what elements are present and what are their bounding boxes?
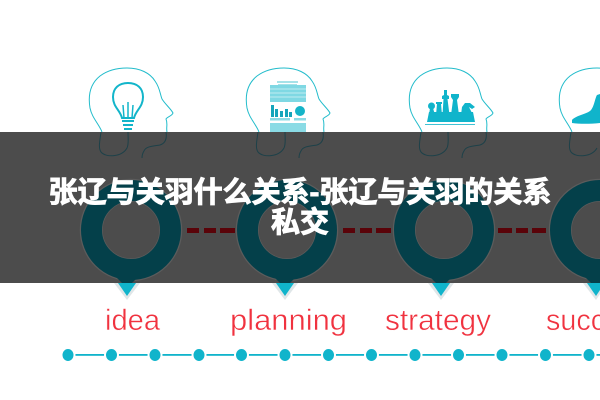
ring 2 bbox=[247, 190, 327, 288]
icon: hand shape bbox=[572, 94, 600, 124]
dark overlay band bbox=[0, 132, 600, 283]
pins below rings bbox=[114, 283, 600, 300]
ring 1 bbox=[91, 190, 171, 288]
icon: light bulb bbox=[113, 83, 143, 129]
dashes 1 bbox=[187, 228, 235, 233]
label: planning: planning bbox=[230, 304, 347, 337]
label: idea: idea bbox=[105, 304, 160, 337]
title bbox=[49, 176, 551, 239]
icon: chess pieces bbox=[425, 90, 475, 125]
timeline with dots bbox=[62, 348, 600, 362]
head outline: idea bbox=[89, 68, 173, 132]
ring 3 bbox=[404, 190, 484, 288]
head outline: strategy bbox=[409, 68, 493, 132]
neck lines bbox=[99, 132, 597, 158]
label: strategy: strategy bbox=[385, 304, 491, 337]
icon: document with chart bbox=[270, 82, 306, 132]
ring 4 bbox=[560, 190, 600, 288]
title: 张辽与关羽什么关系-张辽与关羽的关系 bbox=[49, 177, 551, 209]
dashes 3 bbox=[498, 228, 546, 233]
title: 私交 bbox=[271, 207, 329, 239]
head outline: planning bbox=[246, 68, 330, 132]
rings, connectors and dashes inside the band bbox=[80, 132, 600, 283]
head outline: success bbox=[559, 68, 600, 132]
dashes 2 bbox=[343, 228, 391, 233]
